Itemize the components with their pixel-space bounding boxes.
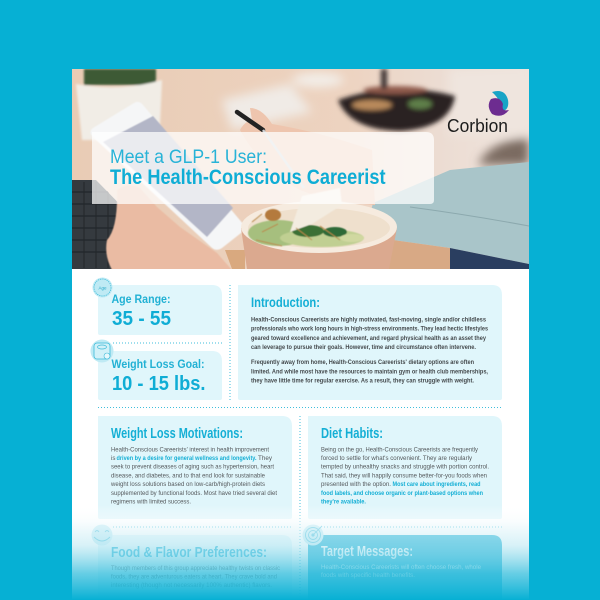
motivations text: Health-Conscious Careerists' interest in health improvement xyxy=(111,446,269,453)
food text: foods, they are adventurous eaters at heart. They crave bold and xyxy=(111,574,277,580)
title line 2: The Health-Conscious Careerist xyxy=(110,165,386,189)
introduction text xyxy=(251,316,488,385)
panel: age range xyxy=(98,285,222,335)
panel: introduction xyxy=(238,285,502,400)
age value: 35 - 55 xyxy=(112,308,171,330)
motivations text: driven by a desire for general wellness and longevity. xyxy=(116,455,257,462)
dotted dividers xyxy=(98,285,503,600)
motivations heading: Weight Loss Motivations: xyxy=(111,426,243,442)
introduction heading: Introduction: xyxy=(251,294,320,310)
bottom fade overlay xyxy=(72,505,529,600)
food text xyxy=(111,565,281,589)
table edge xyxy=(225,250,245,269)
motivations text: supplemented by functional foods. Most have tried several diet xyxy=(111,490,277,497)
logo: Corbion: Corbion xyxy=(447,115,508,136)
target heading: Target Messages: xyxy=(321,544,413,560)
diet text: they're available. xyxy=(321,498,366,506)
dark meal bowl xyxy=(338,69,455,131)
introduction text: can leverage to pursue their goals. However, time and circumstance often intervene. xyxy=(251,344,476,351)
diet heading: Diet Habits: xyxy=(321,426,383,442)
food text: Though members of this group appreciate healthy twists on classic xyxy=(111,565,281,572)
logo: Corbion xyxy=(447,91,509,136)
hand with fork xyxy=(237,108,375,205)
goal label: Weight Loss Goal: xyxy=(112,359,204,371)
diet text: That said, they will happily consume better-for-you foods when xyxy=(321,472,487,479)
document card xyxy=(72,69,529,600)
goal value: 10 - 15 lbs. xyxy=(112,373,206,395)
introduction text: Health-Conscious Careerists are highly motivated, fast-moving, single and/or childless xyxy=(251,316,486,324)
motivations text: disease, and diabetes, and to that end look for sustainable xyxy=(111,472,265,479)
panel: diet habits xyxy=(308,416,502,519)
title line 1: Meet a GLP-1 User: xyxy=(110,147,267,168)
introduction text: limited. And while most have the resources to maintain gym or health club memberships, xyxy=(251,368,488,375)
keyboard xyxy=(72,180,118,269)
panel: weight loss goal xyxy=(98,351,222,400)
diet text: food labels, and choose organic or plant-based options when xyxy=(321,490,483,497)
motivations text xyxy=(110,446,277,506)
motivations text: seek to prevent diseases of aging such as hypertension, heart xyxy=(111,464,274,471)
age label: Age Range: xyxy=(112,292,170,306)
motivations text: weight loss solutions based on low-carb/high-protein diets xyxy=(110,481,266,488)
introduction text: Frequently away from home, Health-Conscious Careerists' dietary options are often xyxy=(251,359,474,366)
diet text: tempted by unhealthy snacks and struggle with portion control. xyxy=(321,464,489,471)
salad bowl xyxy=(241,188,397,269)
plant pot xyxy=(76,69,162,140)
motivations text: regimens with limited success. xyxy=(111,498,191,506)
diet text xyxy=(321,446,489,506)
motivations text: They xyxy=(258,455,273,462)
diet text: Being on the go, Health-Conscious Careerists are frequently xyxy=(321,446,479,453)
sleeve xyxy=(365,162,529,269)
diet text: Most care about ingredients, read xyxy=(392,481,481,488)
icon: age dial xyxy=(92,278,112,298)
target text: Health-Conscious Careerists will often choose fresh, whole xyxy=(321,564,481,571)
icon: scale xyxy=(90,340,114,362)
icon: target xyxy=(302,524,324,546)
icon: smiley face xyxy=(92,524,112,546)
introduction text: professionals who work long hours in high-stress environments. They lead hectic lifestyles xyxy=(251,326,488,333)
food text: interesting (though not necessarily 100% authentic) flavors. xyxy=(111,582,272,589)
panel: target messages xyxy=(308,535,502,600)
diet text: presented with the option. xyxy=(321,481,391,488)
panel: food and flavor preferences xyxy=(98,535,292,600)
icon: age dial: Age xyxy=(98,286,107,290)
hand on phone xyxy=(105,201,231,269)
motivations text: is xyxy=(111,455,116,462)
diet text: forced to settle for what's convenient. They are regularly xyxy=(321,455,473,462)
phone xyxy=(90,102,245,250)
introduction text: geared toward excellence and achievement, and regard physical health as an asset they xyxy=(251,335,486,342)
hero photo xyxy=(72,69,529,270)
introduction text: they have little time for regular exercise. As a result, they can struggle with weight. xyxy=(251,378,474,385)
panel: weight loss motivations xyxy=(98,416,292,519)
food heading: Food & Flavor Preferences: xyxy=(111,545,267,561)
target text: foods with specific health benefits. xyxy=(321,572,415,579)
title panel xyxy=(92,132,434,204)
target text xyxy=(321,564,481,579)
